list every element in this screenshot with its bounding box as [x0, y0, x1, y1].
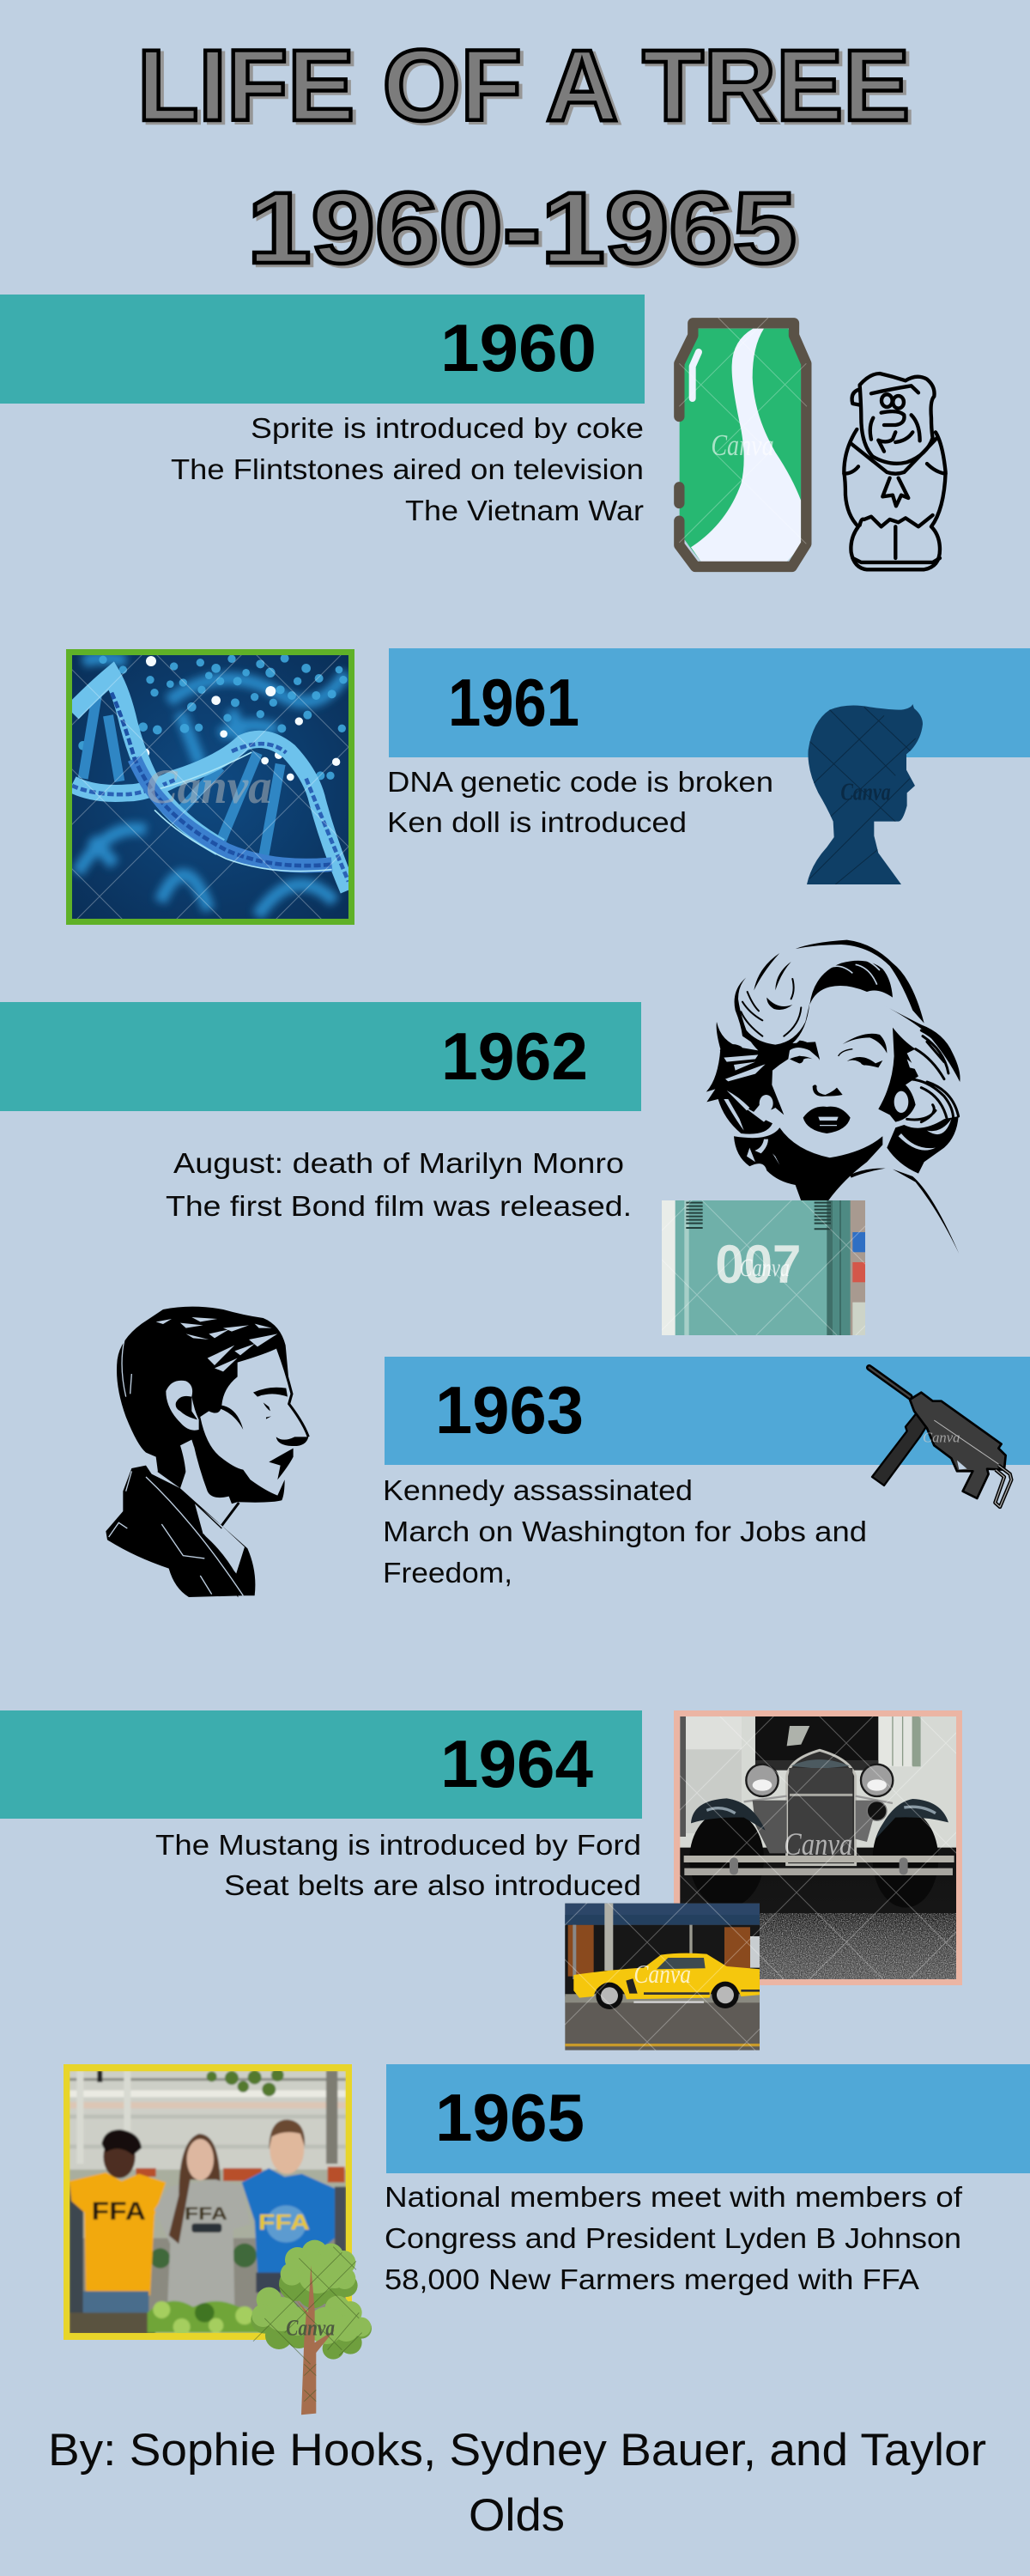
text block 1965: 58,000 New Farmers merged with FFA [385, 2263, 919, 2295]
icon: Marilyn Monroe portrait [706, 940, 960, 1254]
icon: Ken doll silhouette [807, 704, 923, 884]
credits: By: Sophie Hooks, Sydney Bauer, and Taylor [48, 2425, 986, 2476]
year bar 1963 [385, 1357, 1030, 1465]
icon: tree [251, 2240, 372, 2415]
icon: submachine gun [869, 1368, 1011, 1507]
panel: 1964 [0, 1710, 962, 2050]
text block 1961: DNA genetic code is broken [387, 766, 773, 798]
text block 1960: Sprite is introduced by coke [251, 412, 644, 444]
text block 1964 [155, 1829, 641, 1901]
text block 1960: The Vietnam War [405, 495, 644, 526]
year 1962: 1962 [441, 1018, 588, 1094]
text block 1963: Kennedy assassinated [383, 1474, 693, 1506]
photo: yellow Mustang: Canva [633, 1959, 691, 1989]
year 1964: 1964 [440, 1726, 593, 1801]
photo: DNA helix: Canva [146, 761, 272, 814]
icon: submachine gun: Canva [923, 1429, 960, 1445]
panel: 1965 [64, 2064, 1030, 2415]
year 1961: 1961 [448, 665, 579, 740]
text block 1964: The Mustang is introduced by Ford [155, 1829, 641, 1861]
year bar 1960 [0, 295, 645, 404]
student: yellow shirt [70, 2129, 166, 2316]
icon: soda can: Canva [711, 428, 774, 462]
photo: DNA helix [66, 649, 354, 925]
icon: soda can [679, 318, 807, 567]
panel: 1960 [0, 295, 946, 569]
photo: 007 door [662, 1200, 866, 1335]
credits [48, 2425, 986, 2541]
year 1965: 1965 [435, 2080, 585, 2155]
photo: vintage Ford car: Canva [784, 1826, 852, 1862]
student: grey sweatshirt [153, 2133, 235, 2308]
title: 1960-1965 [247, 172, 797, 285]
text block 1960: The Flintstones aired on television [171, 453, 644, 485]
text block 1961 [387, 766, 773, 838]
text block 1962: The first Bond film was released. [166, 1190, 632, 1222]
year bar 1961 [389, 648, 1030, 757]
icon: Kennedy profile portrait [106, 1307, 308, 1597]
text block 1960 [171, 412, 644, 526]
text block 1965 [385, 2181, 963, 2295]
year bar 1962 [0, 1002, 641, 1111]
credits: Olds [469, 2490, 565, 2541]
text block 1965: National members meet with members of [385, 2181, 963, 2213]
text block 1964: Seat belts are also introduced [224, 1869, 641, 1901]
student: yellow shirt: FFA [92, 2197, 146, 2226]
student: grey sweatshirt: FFA [185, 2203, 227, 2224]
panel: 1962 [0, 940, 960, 1335]
panel: 1963 [106, 1307, 1030, 1597]
text block 1965: Congress and President Lyden B Johnson [385, 2222, 961, 2254]
text block 1963 [383, 1474, 867, 1589]
icon: tree: Canva [286, 2315, 335, 2340]
text block 1963: March on Washington for Jobs and [383, 1516, 867, 1547]
student: blue shirt: FFA [258, 2212, 310, 2235]
year 1963: 1963 [435, 1372, 584, 1448]
text block 1962 [166, 1147, 632, 1222]
text block 1962: August: death of Marilyn Monro [173, 1147, 624, 1179]
photo: vintage Ford car [674, 1710, 962, 1985]
text block 1963: Freedom, [383, 1557, 512, 1589]
photo: yellow Mustang [565, 1903, 760, 2050]
photo: 007 door: Canva [740, 1255, 790, 1282]
photo: FFA students [64, 2064, 352, 2340]
student: blue shirt [242, 2119, 337, 2293]
year 1960: 1960 [440, 310, 597, 386]
year bar 1964 [0, 1710, 642, 1819]
title [137, 29, 910, 285]
icon: Ken doll silhouette: Canva [840, 780, 891, 806]
panel: 1961 [66, 648, 1030, 925]
007 stencil text: 007 [715, 1235, 801, 1295]
icon: Fred Flintstone figure [844, 374, 946, 569]
title: LIFE OF A TREE [137, 29, 910, 143]
text block 1961: Ken doll is introduced [387, 806, 687, 838]
year bar 1965 [386, 2064, 1030, 2173]
